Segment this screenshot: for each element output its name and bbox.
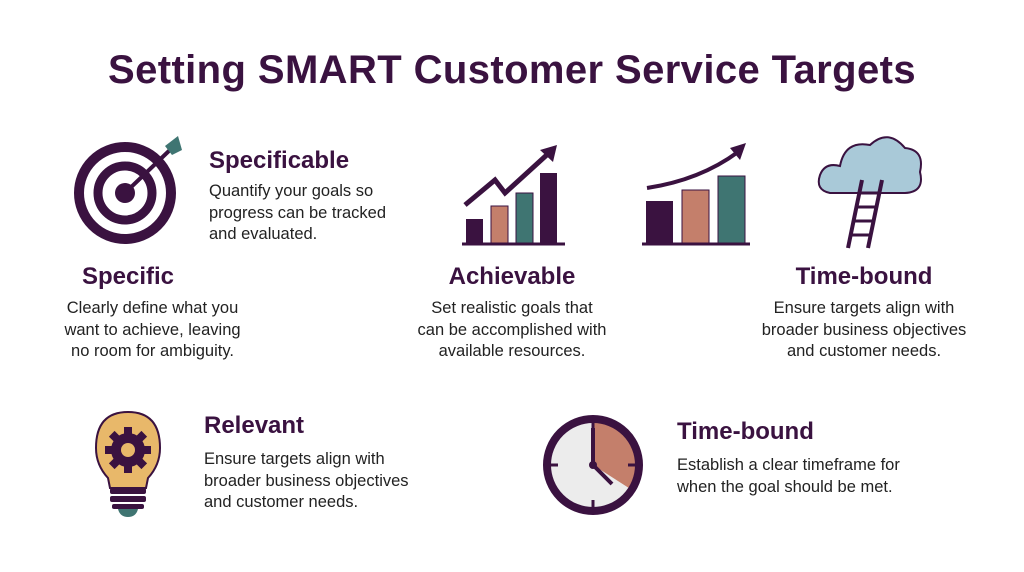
text: Achievable: can be accomplished with [418,320,606,338]
text: Specificable: and evaluated. [209,225,317,243]
text: Time-bound (top) [762,299,966,360]
text: Time-bound (bottom) [677,456,900,496]
text: Time-bound (top): Ensure targets align with [774,299,954,317]
text: Relevant: Ensure targets align with [204,450,385,468]
icon: lightbulb with gear [95,411,161,517]
text: Time-bound (bottom): Establish a clear timeframe for [677,456,900,474]
text: Time-bound (top): broader business objectives [762,320,966,338]
heading: Specific: Specific [82,263,174,290]
text: Specific [64,299,241,360]
text: Achievable: available resources. [439,342,585,360]
text: Achievable: Set realistic goals that [431,299,593,317]
heading: Time-bound (bottom): Time-bound [677,418,814,445]
text: Relevant: and customer needs. [204,493,358,511]
icon: bar chart 1 [462,145,565,246]
text: Specificable: progress can be tracked [209,204,386,222]
heading: Specificable: Specificable [209,147,349,174]
text: Specificable: Quantify your goals so [209,182,373,200]
heading: Time-bound (top): Time-bound [796,263,932,290]
text: Specific: no room for ambiguity. [71,342,234,360]
icon: clock [543,415,643,515]
heading: Relevant: Relevant [204,412,304,439]
heading: Achievable: Achievable [449,263,575,290]
text: Specific: Clearly define what you [67,299,238,317]
icon: bar chart 2 [642,143,750,246]
text: Relevant: broader business objectives [204,472,409,490]
title: Setting SMART Customer Service Targets [108,48,916,92]
text: Time-bound (bottom): when the goal should be met. [677,478,893,496]
icon: target [74,136,182,244]
text: Specific: want to achieve, leaving [64,320,241,338]
text: Relevant [204,450,409,511]
text: Achievable [418,299,606,360]
icon: cloud with ladder [818,136,922,248]
text: Specificable [209,182,386,243]
text: Time-bound (top): and customer needs. [787,342,941,360]
